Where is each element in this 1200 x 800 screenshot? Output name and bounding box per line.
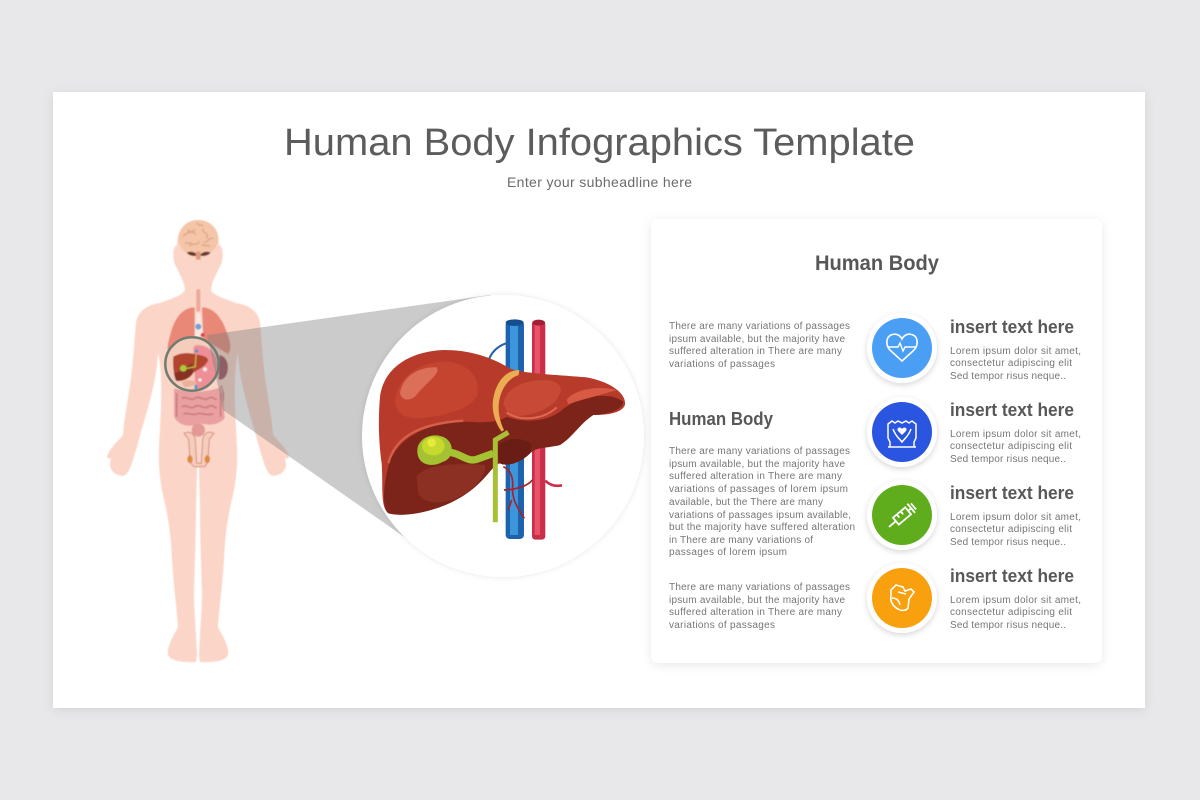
item 2: hands [867,397,1081,467]
left text block 1 [669,321,850,370]
item text [950,595,1081,631]
liver [379,350,625,515]
lungs [168,307,230,354]
left text block 2: ipsum available, but the majority have [669,459,845,470]
brain [178,220,218,260]
left heading: Human Body [669,409,773,429]
left text block 1: variations of passages [669,359,775,370]
item text [950,346,1081,382]
item 4: organ [867,563,1081,633]
item heading: insert text here [950,400,1074,420]
item text: Lorem ipsum dolor sit amet, [950,429,1081,440]
ligament [493,370,519,432]
spleen [219,355,228,380]
magnifier wedge [207,295,510,548]
icon: hands holding heart [867,397,937,467]
left text block 3: suffered alteration in There are many [669,607,842,618]
item heading: insert text here [950,483,1074,503]
item text: Lorem ipsum dolor sit amet, [950,346,1081,357]
vessels [489,319,562,540]
item text: consectetur adipiscing elit [950,607,1072,618]
left text block 1: ipsum available, but the majority have [669,334,845,345]
item text: Lorem ipsum dolor sit amet, [950,512,1081,523]
subtitle: Enter your subheadline here [507,174,692,190]
item text: consectetur adipiscing elit [950,524,1072,535]
item text: Sed tempor risus neque.. [950,620,1066,631]
icon: syringe [867,480,937,550]
left text block 2: variations of passages of lorem ipsum [669,484,848,495]
item text: Sed tempor risus neque.. [950,537,1066,548]
left text block 2: in There are many variations of [669,535,813,546]
left text block 3: ipsum available, but the majority have [669,595,845,606]
kidney [218,385,224,410]
item text: consectetur adipiscing elit [950,358,1072,369]
left text block 2: but the majority have suffered alteration [669,522,855,533]
info panel [651,219,1102,663]
item text: Sed tempor risus neque.. [950,454,1066,465]
gallbladder [417,435,493,465]
item text: Lorem ipsum dolor sit amet, [950,595,1081,606]
item 1: heart [867,313,1081,383]
pelvic organs [184,432,214,467]
item heading: insert text here [950,317,1074,337]
organs inside magnifier [165,338,218,391]
bile duct [495,432,508,522]
left text block 2: variations of passages ipsum available, [669,510,851,521]
left text block 2: suffered alteration in There are many [669,471,842,482]
item text: consectetur adipiscing elit [950,441,1072,452]
slide background [53,92,1145,708]
left text block 3: There are many variations of passages [669,582,850,593]
human body figure [107,220,289,662]
item 3: syringe [867,480,1081,550]
left text block 3 [669,582,850,631]
left text block 3: variations of passages [669,620,775,631]
item text [950,512,1081,548]
panel heading: Human Body [815,252,939,275]
body silhouette [107,220,289,662]
trachea [196,289,200,311]
intestines [174,387,225,426]
title: Human Body Infographics Template [284,122,915,164]
icon: stomach organ [867,563,937,633]
zoom circle with liver [362,295,644,577]
item text [950,429,1081,465]
left text block 2: passages of lorem ipsum [669,547,787,558]
left text block 2: There are many variations of passages [669,446,850,457]
left text block 1: suffered alteration in There are many [669,346,842,357]
left text block 2: available, but the There are many [669,497,823,508]
item heading: insert text here [950,566,1074,586]
icon: heartbeat [867,313,937,383]
left text block 2 [669,446,855,558]
magnifier ring [165,337,219,391]
left text block 1: There are many variations of passages [669,321,850,332]
item text: Sed tempor risus neque.. [950,371,1066,382]
